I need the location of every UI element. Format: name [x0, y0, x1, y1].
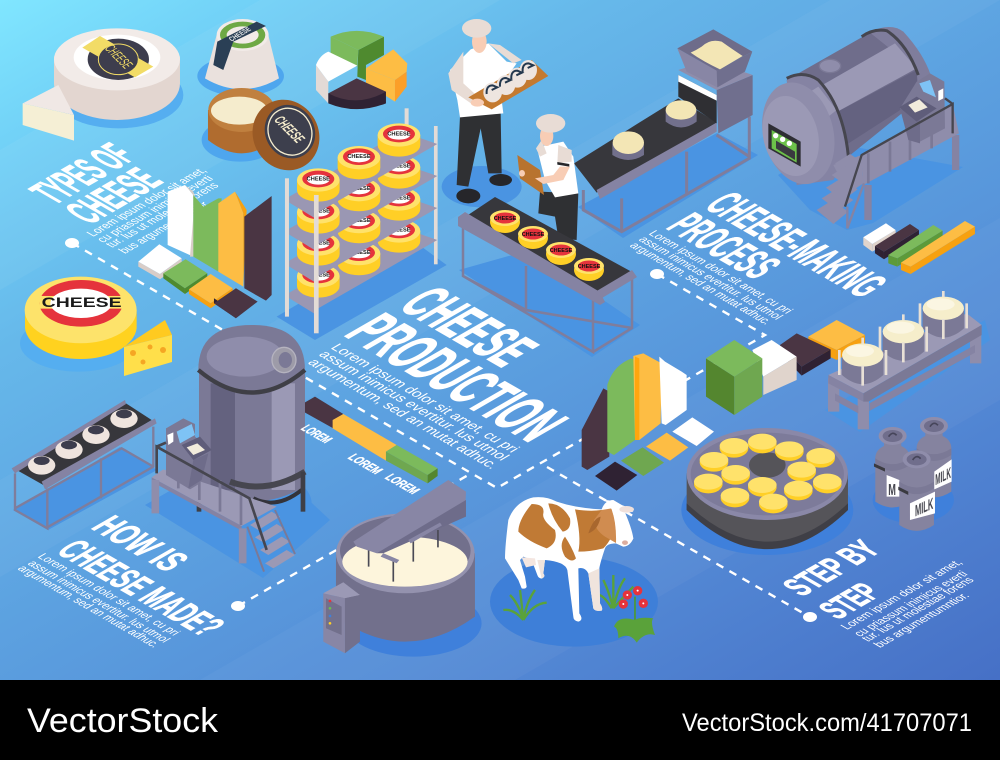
main title	[330, 278, 583, 451]
text block: how is cheese made: argumentum, sed an mutat adhuc.	[14, 563, 163, 650]
three vats on table	[828, 291, 982, 429]
text block: types of cheese	[19, 136, 222, 256]
tall cheese with label: CHEESE	[227, 25, 253, 43]
text block: how is cheese made: CHEESE MADE?	[47, 534, 233, 642]
main title: CHEESE	[385, 278, 553, 375]
white cheese wheel with wedge	[23, 28, 183, 141]
cheese rack: CHEESE	[307, 272, 330, 278]
lorem bar labels: LOREM	[297, 422, 336, 445]
main title: PRODUCTION	[330, 304, 583, 451]
cheese conveyor table: CHEESE	[578, 264, 601, 270]
text block: types of cheese: TYPES OF	[19, 136, 146, 210]
title paragraph: argumentum, sed an mutat adhuc.	[304, 356, 503, 472]
chef with clipboard	[517, 114, 578, 240]
text block: cheese-making process: argumentum, sed an mutat adhuc.	[626, 240, 775, 327]
text block: cheese-making process: PROCESS	[655, 207, 791, 286]
cheese rack: CHEESE	[347, 218, 371, 224]
title paragraph: Lorem ipsum dolor sit amet, cu pri	[327, 341, 523, 455]
cheese rack: CHEESE	[347, 186, 371, 192]
text block: step by step: bus argumentumntior.	[870, 590, 973, 650]
cheese pie segments	[316, 31, 407, 109]
cheese conveyor table: CHEESE	[522, 232, 545, 238]
wooden cheese box with lid	[202, 88, 332, 182]
shadows under machines	[13, 133, 990, 578]
footer bar: VectorStock.com/41707071	[682, 709, 972, 737]
right bar chart	[582, 353, 714, 491]
text block: types of cheese: cu priassum inimicus everti	[93, 173, 216, 245]
cheese rack: CHEESE	[387, 227, 411, 233]
cheese rack: CHEESE	[387, 195, 411, 201]
cheese rack: CHEESE	[347, 250, 371, 256]
upper conveyor with hopper	[574, 29, 753, 232]
text block: types of cheese: bus argumentumntior.	[115, 198, 214, 256]
lorem bar labels: LOREM	[381, 471, 424, 496]
text block: types of cheese: tur. lus ut molestiae forens	[102, 180, 222, 250]
round cheese table	[681, 428, 853, 555]
big yellow cheese wheel	[20, 277, 137, 372]
milk cans	[873, 417, 954, 531]
cheese conveyor table: CHEESE	[494, 216, 517, 222]
footer bar	[0, 680, 1000, 760]
text block: cheese-making process: assum inimicus evertitur. lus utmol	[635, 234, 786, 322]
cheese rack: CHEESE	[387, 163, 411, 169]
mixing vat	[323, 480, 482, 657]
green, white, dark and yellow blocks	[706, 320, 865, 415]
lorem bar labels	[297, 422, 424, 496]
text block: how is cheese made	[14, 510, 233, 650]
text block: how is cheese made: Lorem ipsum dolor sit amet, cu pri	[34, 551, 183, 638]
lorem colour bar	[303, 397, 438, 483]
cheese rack	[277, 108, 447, 340]
small colour bars top right	[863, 221, 975, 274]
milk cans: MILK	[915, 494, 933, 520]
text block: types of cheese: Lorem ipsum dolor sit amet,	[83, 165, 210, 239]
chef with tray	[442, 19, 548, 207]
big yellow cheese wheel: CHEESE	[42, 295, 122, 310]
main horizontal tank with platform	[752, 27, 959, 228]
text: MILK	[935, 464, 951, 489]
left bar chart	[138, 185, 272, 318]
text block: step by step: Lorem ipsum dolor sit amet,	[837, 557, 966, 632]
text block: cheese-making process: Lorem ipsum dolor sit amet, cu pri	[645, 228, 796, 316]
cheese rack: CHEESE	[307, 176, 330, 182]
cheese wedge	[124, 320, 172, 376]
cheese rack: CHEESE	[387, 131, 411, 137]
text block: step by step: STEP	[809, 577, 890, 624]
cheese rack: CHEESE	[307, 240, 330, 246]
dashed connector lines	[72, 243, 810, 617]
tall cheese with label	[197, 19, 284, 96]
text block: step by step: tur. lus ut molestiae forens	[858, 575, 977, 644]
silo with platform and console	[152, 325, 312, 572]
text block: types of cheese: CHEESE	[54, 161, 173, 230]
cheese conveyor table	[458, 197, 637, 352]
text block: step by step	[773, 534, 977, 650]
text block: step by step: STEP BY	[773, 534, 889, 601]
footer bar: VectorStock	[27, 702, 219, 740]
cheese rack: CHEESE	[347, 154, 371, 160]
white cheese wheel with wedge: CHEESE	[101, 43, 136, 71]
title paragraph: assum inimicus evertitur. lus utmol	[315, 348, 513, 463]
text block: how is cheese made: HOW IS	[82, 510, 197, 577]
cow on grass patch	[490, 497, 658, 647]
text block: how is cheese made: assum inimicus evertitur. lus utmol	[24, 558, 173, 645]
milk cans: M	[888, 482, 896, 499]
small cheese conveyor	[12, 400, 157, 528]
cheese rack: CHEESE	[307, 208, 330, 214]
connector dots	[65, 238, 817, 622]
text block: cheese-making process	[626, 186, 898, 327]
wooden cheese box with lid: CHEESE	[270, 114, 308, 146]
lorem bar labels: LOREM	[344, 451, 387, 476]
text block: step by step: cu priassum inimicus everti	[850, 569, 971, 639]
cheese conveyor table: CHEESE	[550, 248, 573, 254]
